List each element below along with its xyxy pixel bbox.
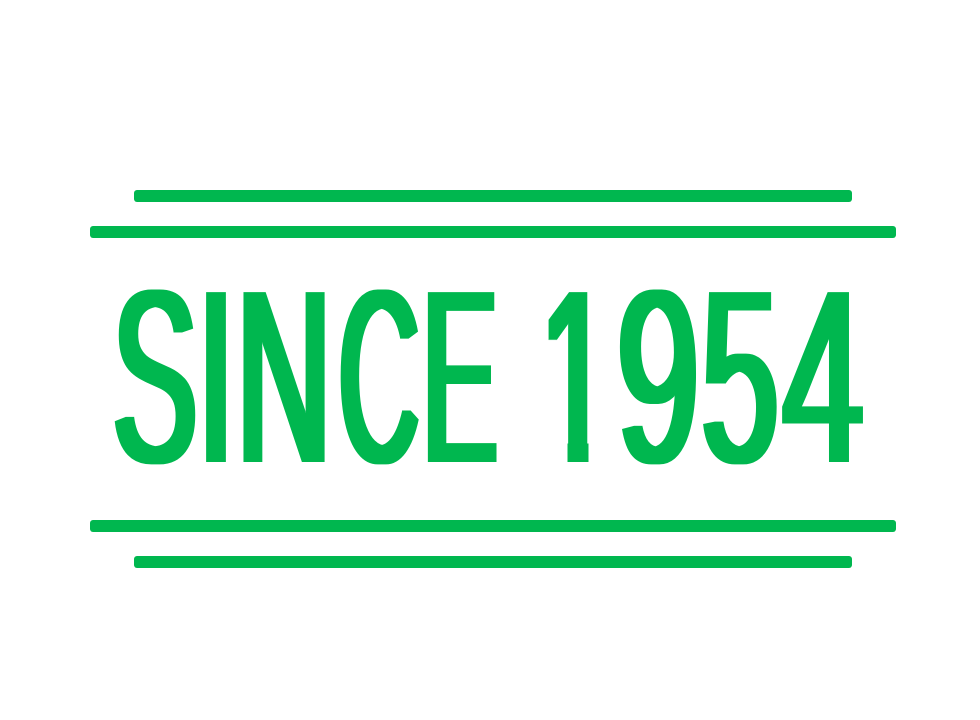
title: SINCE 1954: 1 [540,239,611,515]
bottom long bar [90,520,896,532]
title: SINCE 1954 [113,238,863,515]
title: SINCE 1954: 9 [617,240,699,515]
top short bar [134,190,852,202]
top long bar [90,226,896,238]
title: SINCE 1954: 4 [783,239,863,514]
title: SINCE 1954: S [113,239,197,515]
title: SINCE 1954: I [199,239,233,515]
bottom short bar [134,556,852,568]
title: SINCE 1954: E [423,238,497,515]
title: SINCE 1954: 5 [702,240,778,515]
title: SINCE 1954: C [339,239,419,515]
title: SINCE 1954: N [237,238,331,514]
